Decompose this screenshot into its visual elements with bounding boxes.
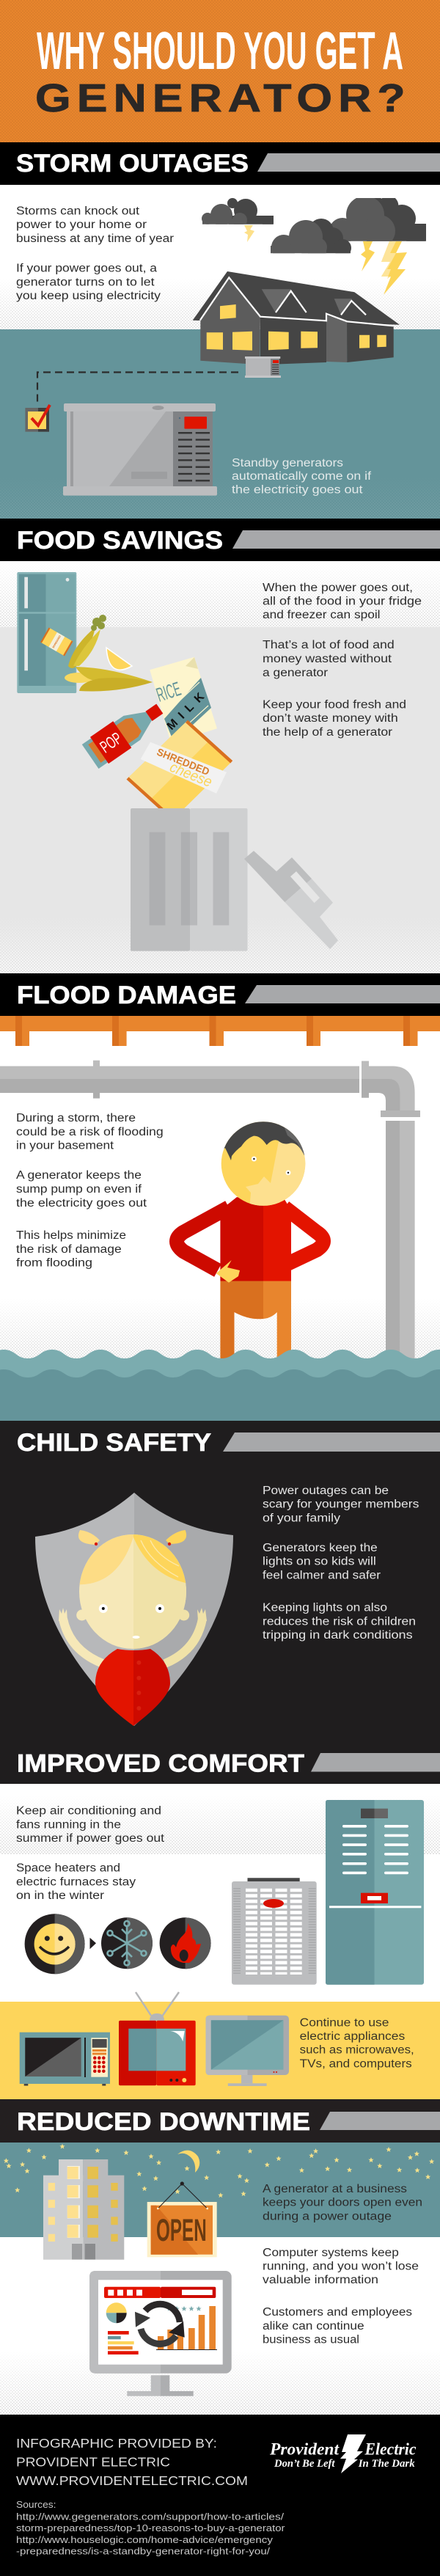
icon: shredded cheese bag [128,721,232,819]
logo: Provident Electric: Don’t Be Left [274,2458,335,2470]
text: comfort: electric furnaces stay [16,1876,136,1888]
icon: shield [35,1493,233,1726]
text: reduced downtime: during a power outage [263,2210,392,2222]
icon: television [119,1992,196,2085]
text: provider credit: PROVIDENT ELECTRIC [16,2455,170,2470]
text: appliances: electric appliances [300,2030,405,2043]
icon: shredded cheese bag: cheese [167,759,214,791]
text: child safety: tripping in dark conditions [263,1629,413,1642]
text: food savings: When the power goes out, [263,582,413,594]
text: reduced downtime: valuable information [263,2274,378,2286]
heading: improved comfort [17,1750,440,1778]
text: storm intro: If your power goes out, a [16,263,157,275]
icon: pop bottle: POP [96,728,125,756]
panel: child safety [0,1421,440,1784]
icon: trash can [131,808,248,951]
text: food savings [263,582,422,739]
pie chart [106,2302,127,2323]
title line 2: GENERATOR? [35,76,406,120]
heading bar: storm outages [0,142,440,185]
text: sources: storm-preparedness/top-10-reasons-to-buy-a-generator [16,2523,285,2533]
text: flood damage: from flooding [16,1257,92,1269]
icon: microwave [20,2032,110,2086]
text: child safety: of your family [263,1512,340,1524]
logo: Provident Electric: Electric [364,2440,417,2459]
icon: rice milk carton: MILK [165,690,207,733]
arrow: dashed connector [37,373,238,403]
text: flood damage: the electricity goes out [16,1197,147,1210]
text: storm intro: generator turns on to let [16,276,155,289]
logo: Provident Electric: Provident [269,2440,340,2459]
logo: Provident Electric: In The Dark [358,2458,415,2470]
panel: storm outages [0,142,440,519]
icon: celery [68,615,106,668]
text: comfort: Keep air conditioning and [16,1805,161,1818]
text: provider credit: WWW.PROVIDENTELECTRIC.COM [16,2473,248,2488]
heading bar: food savings [0,519,440,561]
icon: computer monitor [205,2016,289,2086]
icon: lemon wedge [106,648,132,670]
text: sources: http://www.gegenerators.com/support/how-to-articles/ [16,2511,285,2522]
logo: Provident Electric [269,2434,417,2473]
icon: small cheese bag: SHREDDED [52,634,62,649]
text: child safety: scary for younger members [263,1499,419,1511]
icon: pop bottle [81,695,169,770]
text: sources: Sources: [16,2500,56,2510]
illustration: standby generator [63,403,217,496]
text: sources [16,2500,285,2557]
text: flood damage [16,1112,164,1269]
heading bar: storm outages: STORM OUTAGES [16,150,249,178]
icon: rice milk carton [150,657,217,743]
text: reduced downtime [263,2183,422,2346]
text: comfort: summer if power goes out [16,1832,165,1845]
text: storm intro: you keep using electricity [16,290,161,302]
icon: small storm cloud [202,198,274,242]
text: appliances [300,2016,414,2070]
horizontal bars [108,2331,139,2354]
text: appliances: TVs, and computers [300,2057,412,2070]
icon: rice milk carton: RICE [154,678,183,706]
text: standby generators: Standby generators [232,457,343,469]
icon: smiley [25,1914,85,1974]
icon: small cheese bag [40,628,73,656]
text: flood damage: This helps minimize [16,1229,126,1242]
heading: child safety: CHILD SAFETY [17,1429,211,1457]
illustration: furnace unit [326,1800,424,1985]
icon: checkbox [25,405,50,432]
text: child safety: feel calmer and safer [263,1569,381,1581]
text: flood damage: the risk of damage [16,1243,122,1256]
text: standby generators: the electricity goes out [232,484,363,497]
icon: small generator [245,356,281,378]
text: appliances: such as microwaves, [300,2044,414,2057]
text: reduced downtime: keeps your doors open even [263,2197,422,2209]
text: child safety: Power outages can be [263,1485,389,1497]
text: flood damage: A generator keeps the [16,1169,142,1182]
text: flood damage: in your basement [16,1140,114,1152]
heading bar: reduced downtime: REDUCED DOWNTIME [17,2108,310,2136]
text: provider credit [16,2436,248,2488]
text: flood damage: could be a risk of flooding [16,1126,164,1138]
text: comfort: Space heaters and [16,1862,120,1875]
icon: large storm clouds and lightning [271,196,426,295]
text: child safety: reduces the risk of children [263,1615,416,1628]
text: comfort: on in the winter [16,1889,104,1902]
illustration: worried man [177,1119,323,1363]
text: food savings: the help of a generator [263,726,392,739]
panel: improved comfort [0,1750,440,2099]
panel: footer [0,2415,440,2576]
text: food savings: all of the food in your fridge [263,596,422,607]
text: comfort: fans running in the [16,1818,121,1831]
icon: refresh arrows [135,2304,185,2344]
text: storm intro: power to your home or [16,219,147,231]
illustration: air conditioner [232,1878,317,1985]
icon: night stars [4,2144,434,2198]
arrow: triangle [89,1938,96,1949]
text: appliances: Continue to use [300,2016,389,2029]
heading bar: food savings: FOOD SAVINGS [17,527,223,555]
text: food savings: and freezer can spoil [263,609,380,621]
bar chart [158,2306,216,2349]
text: reduced downtime: running, and you won’t lose [263,2261,419,2272]
text: storm intro: business at any time of year [16,233,174,245]
illustration: house [193,271,400,365]
illustration: dashboard monitor [89,2271,232,2396]
text: flood damage: During a storm, there [16,1112,136,1124]
text: food savings: a generator [263,667,328,679]
band: appliances [0,1992,440,2099]
text: reduced downtime: Computer systems keep [263,2247,399,2259]
heading: child safety [17,1429,440,1457]
heading bar: flood damage [0,973,440,1016]
illustration: office building [43,2159,124,2260]
heading: improved comfort: IMPROVED COMFORT [17,1750,304,1778]
text: sources: -preparedness/is-a-standby-generator-right-for-you/ [16,2547,271,2557]
icon: lightning bolt [340,2434,366,2473]
text: storm intro: Storms can knock out [16,205,140,217]
text: sources: http://www.houselogic.com/home-advice/emergency [16,2535,274,2545]
icon: open sign [147,2181,217,2257]
text: standby generators: automatically come on if [232,470,372,483]
text: child safety: Generators keep the [263,1542,378,1554]
text: provider credit: INFOGRAPHIC PROVIDED BY: [16,2436,217,2451]
panel: flood damage [0,973,440,1421]
heading bar: reduced downtime [0,2099,440,2143]
rating stars [166,2306,202,2311]
text: child safety [263,1485,419,1642]
icon: flame [160,1917,211,1969]
text: reduced downtime: Customers and employees [263,2306,412,2319]
icon: crescent moon [177,2151,199,2173]
text: child safety: lights on so kids will [263,1556,376,1568]
icon: open sign: OPEN [156,2213,207,2248]
text: food savings: don’t waste money with [263,712,398,725]
panel: reduced downtime [0,2099,440,2415]
illustration: pipe [0,1061,420,1363]
text: comfort [16,1805,165,1902]
icon: corn [65,667,153,691]
text: reduced downtime: alike can continue [263,2320,364,2332]
text: reduced downtime: A generator at a business [263,2183,407,2195]
illustration: orange ceiling beam [0,1016,440,1046]
illustration: frightened girl [59,1529,207,1726]
text: food savings: money wasted without [263,653,392,665]
text: storm intro [16,205,174,302]
text: food savings: Keep your food fresh and [263,699,406,711]
illustration: open fridge [17,572,76,693]
text: flood damage: sump pump on even if [16,1183,142,1196]
text: food savings: That’s a lot of food and [263,639,395,651]
text: child safety: Keeping lights on also [263,1602,387,1614]
icon: snowflake [101,1917,153,1969]
illustration: flood water [0,1350,440,1421]
panel: header [0,0,440,142]
text: reduced downtime: business as usual [263,2334,359,2346]
panel: food savings [0,519,440,973]
heading bar: flood damage: FLOOD DAMAGE [17,981,236,1009]
icon: trash can lid [244,851,338,949]
text: standby generators [232,457,372,497]
icon: shredded cheese bag: SHREDDED [155,746,211,777]
